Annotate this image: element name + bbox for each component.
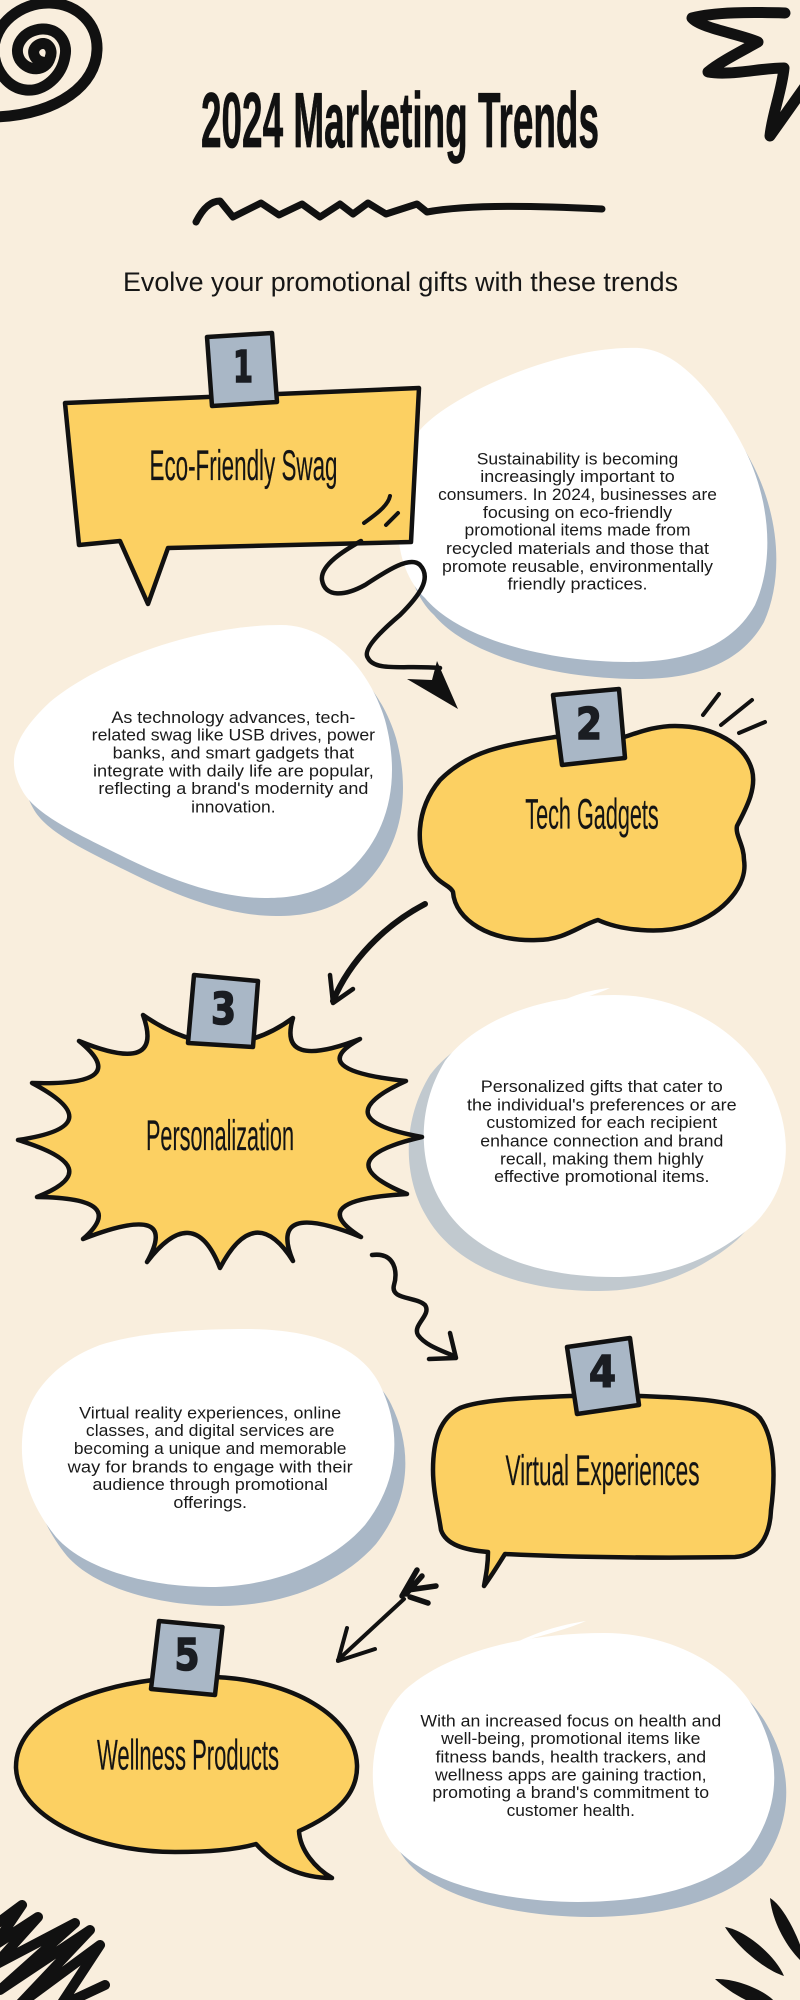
- panel: trend 1 description: consumers. In 2024, businesses are: [438, 485, 717, 504]
- panel: trend 2 heading callout: 2: [576, 699, 602, 750]
- panel: trend 5 description: well-being, promotional items like: [440, 1729, 700, 1748]
- decoration: top-left spiral: [0, 3, 97, 117]
- panel: trend 2 description: innovation.: [191, 798, 276, 816]
- arrow: trend 3 to 4: [372, 1255, 456, 1359]
- panel: trend 3 heading burst: [18, 975, 422, 1268]
- decoration: top-right squiggle: [692, 13, 800, 136]
- panel: trend 1 description: Sustainability is becoming: [477, 449, 678, 468]
- panel: trend 2 description: related swag like USB drives, power: [92, 726, 375, 745]
- panel: trend 5 heading callout: 5: [174, 1630, 200, 1681]
- accent marks: [364, 496, 398, 525]
- panel: trend 1 description: recycled materials and those that: [446, 539, 709, 558]
- panel: trend 1 description: [398, 348, 776, 679]
- accent dashes: [703, 694, 765, 733]
- badge 3: [188, 975, 258, 1047]
- panel: trend 3 heading burst: 3: [211, 984, 236, 1035]
- subtitle: Evolve your promotional gifts with these trends: [123, 267, 678, 297]
- panel: trend 2 description: As technology advances, tech-: [111, 708, 355, 727]
- decoration: bottom-left scribble: [0, 1905, 105, 2000]
- panel: trend 2 heading callout: Tech Gadgets: [525, 791, 659, 839]
- panel: trend 1 heading callout: [65, 333, 419, 604]
- panel: trend 4 description: classes, and digital services are: [86, 1421, 334, 1440]
- panel: trend 4 description: way for brands to engage with their: [67, 1457, 353, 1476]
- panel: trend 1 description: focusing on eco-friendly: [483, 503, 673, 522]
- panel: trend 5 heading callout: [16, 1621, 357, 1878]
- panel: trend 2 description: integrate with daily life are popular,: [93, 761, 374, 780]
- panel: trend 4 description: [22, 1329, 405, 1606]
- badge 2: [553, 689, 625, 765]
- badge 4: [567, 1338, 639, 1414]
- panel: trend 5 description: customer health.: [507, 1801, 635, 1820]
- panel: trend 1 description: friendly practices.: [508, 575, 648, 594]
- panel: trend 2 description: banks, and smart gadgets that: [113, 744, 354, 762]
- panel: trend 4 description: Virtual reality experiences, online: [79, 1403, 341, 1422]
- title underline: [196, 201, 602, 222]
- badge 5: [151, 1621, 222, 1695]
- panel: trend 2 heading callout: [420, 689, 765, 940]
- panel: trend 1 description: increasingly important to: [480, 467, 675, 486]
- panel: trend 1 description: promote reusable, environmentally: [442, 557, 714, 576]
- panel: trend 5 description: promoting a brand's commitment to: [432, 1783, 709, 1802]
- panel: trend 4 description: becoming a unique and memorable: [74, 1439, 346, 1458]
- panel: trend 1 heading callout: 1: [233, 342, 253, 393]
- panel: trend 4 heading callout: [433, 1338, 774, 1586]
- arrow: trend 2 to 3: [330, 904, 425, 1003]
- panel: trend 3 description: customized for each recipient: [486, 1113, 717, 1132]
- panel: trend 3 description: recall, making them highly: [500, 1149, 704, 1168]
- decoration: bottom-right leaves: [715, 1898, 800, 2000]
- panel: trend 3 description: effective promotional items.: [494, 1167, 709, 1186]
- panel: trend 4 heading callout: 4: [589, 1347, 616, 1398]
- panel: trend 5 description: With an increased focus on health and: [420, 1711, 721, 1730]
- arrow: trend 4 to 5: [338, 1570, 436, 1661]
- panel: trend 2 description: [14, 625, 403, 916]
- panel: trend 3 heading burst: Personalization: [146, 1112, 294, 1160]
- panel: trend 5 heading callout: Wellness Products: [97, 1732, 279, 1780]
- badge 1: [207, 333, 277, 406]
- panel: trend 5 description: fitness bands, health trackers, and: [436, 1748, 706, 1766]
- panel: trend 4 description: audience through promotional: [93, 1475, 328, 1494]
- panel: trend 4 description: offerings.: [173, 1493, 247, 1512]
- panel: trend 5 description: wellness apps are gaining traction,: [434, 1765, 707, 1784]
- panel: trend 3 description: enhance connection and brand: [480, 1131, 723, 1150]
- panel: trend 3 description: Personalized gifts that cater to: [481, 1077, 723, 1096]
- panel: trend 3 description: [409, 988, 786, 1291]
- panel: trend 1 description: promotional items made from: [464, 521, 690, 540]
- panel: trend 1 heading callout: Eco-Friendly Swag: [150, 442, 338, 490]
- panel: trend 2 description: reflecting a brand's modernity and: [98, 779, 368, 798]
- panel: trend 5 description: [373, 1621, 786, 1917]
- arrow: trend 1 to 2: [322, 541, 458, 709]
- panel: trend 3 description: the individual's preferences or are: [467, 1095, 737, 1114]
